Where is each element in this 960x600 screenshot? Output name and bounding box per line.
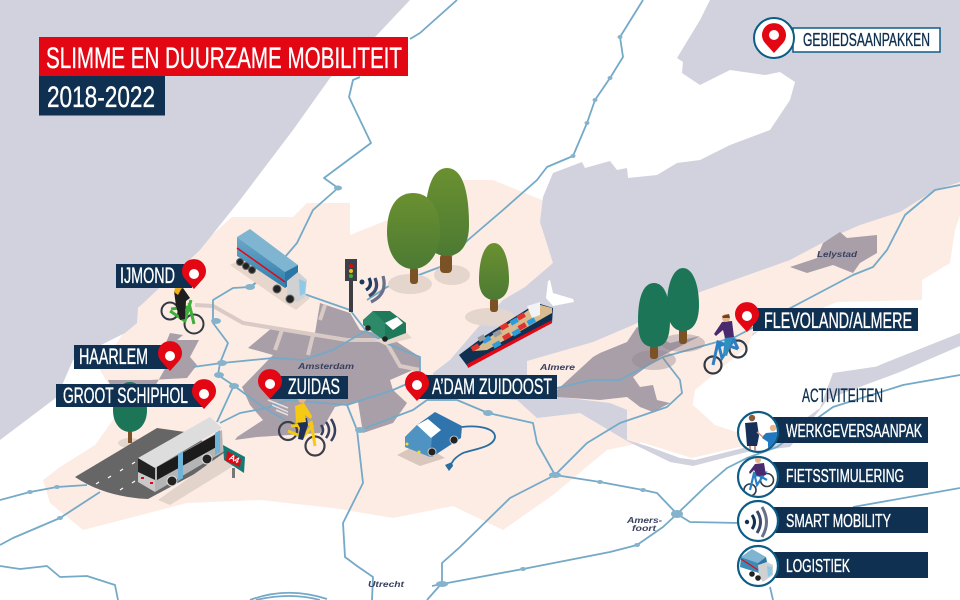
IJsselmeer and Markermeer [433,0,960,466]
place name: Amersfoort: foort [632,524,656,533]
label: A'dam Zuidoost: A’DAM ZUIDOOST [432,374,552,399]
place name: Amsterdam: Amsterdam [297,362,354,371]
legend: gebiedsaanpakken [754,18,940,58]
label: Zuidas: ZUIDAS [288,374,340,399]
title [39,37,408,116]
heading: activiteiten: ACTIVITEITEN [802,386,883,407]
years bar [39,76,165,116]
road sign A4 [223,445,245,478]
title red bar [39,37,408,76]
label: Zuidas [258,369,348,399]
place name: Lelystad: Lelystad [817,250,858,259]
activity: logistiek: LOGISTIEK [786,556,850,576]
title: 2018-2022 [47,81,155,114]
Haarlem built-up area [108,333,199,395]
illustration: tree Schiphol [113,382,147,448]
place name: Amersfoort [626,516,662,533]
illustration: trees Flevoland front [632,283,676,370]
title: SLIMME EN DUURZAME MOBILITEIT [46,42,402,75]
illustration: tree front [387,193,440,294]
label: A'dam Zuidoost [405,371,557,401]
Amsterdam built-up area [235,303,420,440]
illustration: truck [230,229,310,310]
place name: Utrecht: Utrecht [368,580,404,589]
illustration: container ship [459,280,574,368]
activity: smart mobility: SMART MOBILITY [786,511,891,531]
icon: cyclist [744,457,774,496]
label: Groot Schiphol [56,379,216,409]
illustration: road with bus [75,417,245,505]
illustration: electric car [397,412,495,471]
icon: handshake [745,414,777,451]
illustration: trees Flevoland back [661,268,705,352]
label: IJmond: IJMOND [120,263,175,288]
Flevoland [527,182,960,420]
road sign A4: A4 [228,453,241,465]
activity: fietsstimulering [738,457,928,497]
place name: Almere: Almere [539,363,576,372]
activity: smart mobility [738,501,928,541]
activity: werkgeversaanpak [738,412,928,452]
eastern waterway [830,333,960,398]
illustration: small tree [465,243,515,326]
Flevoland south strip [627,404,748,458]
main region [43,180,640,530]
Lelystad built-up area [790,232,877,273]
label: Haarlem: HAARLEM [79,344,148,369]
city canals [195,305,420,370]
activity: fietsstimulering: FIETSSTIMULERING [786,466,904,486]
illustration: cyclist Flevoland [704,314,746,374]
icon: wireless signal [745,507,766,537]
illustration: cyclist IJmond [162,279,204,334]
label: Groot Schiphol: GROOT SCHIPHOL [63,383,188,408]
illustration: tree back [425,168,470,285]
illustration: traffic light with signal [345,259,384,312]
activity: logistiek [738,546,928,586]
road junction markers [27,35,683,587]
Almere built-up area [557,327,700,412]
label: Flevoland/Almere [735,302,918,333]
illustration: cyclist Zuidas [268,395,335,456]
icon: truck [740,549,773,582]
North Sea [0,0,410,440]
place name: Amersfoort: Amers- [626,516,662,525]
illustration: green car [363,311,412,345]
